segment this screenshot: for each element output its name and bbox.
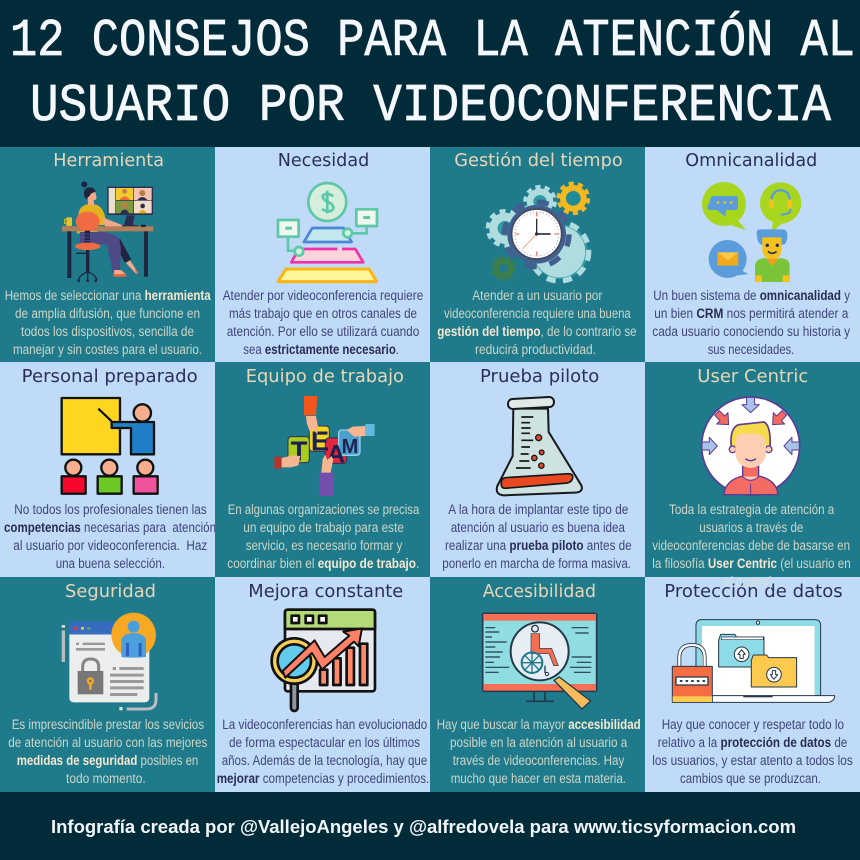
text block: Gestión del tiempo [437, 288, 637, 357]
icon: laboratory flask [497, 397, 582, 495]
panel: Personal preparado [0, 362, 216, 577]
icon: hands building the word TEAM [274, 396, 375, 496]
text block: Prueba piloto: A la hora de implantar este tipo de [448, 502, 628, 517]
text block: Gestión del tiempo: videoconferencia requiere una buena [444, 306, 631, 321]
icon: pyramid with coin [278, 183, 377, 282]
icon: user surrounded by arrows [702, 397, 800, 495]
text block: Seguridad: de atención al usuario con las mejores [8, 735, 208, 750]
heading: Personal preparado: Personal preparado [22, 366, 198, 387]
icon: communication channels and agent [702, 182, 801, 282]
panel: Protección de datos [645, 577, 860, 792]
text block: Equipo de trabajo [227, 502, 420, 571]
heading: Mejora constante: Mejora constante [248, 581, 403, 602]
text block: User Centric: Toda la estrategia de atención a [669, 502, 835, 517]
panel: Gestión del tiempo [430, 147, 645, 362]
text block: Necesidad: Atender por videoconferencia requiere [223, 288, 423, 303]
text block: Personal preparado [4, 502, 216, 571]
text block: Necesidad: más trabajo que en otros canales de [229, 306, 417, 321]
text block: Accesibilidad: través de videoconferencias. Hay [453, 753, 625, 768]
text block: Seguridad: Es imprescindible prestar los sevicios [12, 717, 204, 732]
text block: Seguridad: todo momento. [66, 771, 146, 786]
heading: Prueba piloto: Prueba piloto [480, 366, 599, 387]
text block: Necesidad: sea estrictamente necesario. [243, 342, 399, 357]
panel: Omnicanalidad [645, 147, 860, 362]
text block: User Centric: la filosofía User Centric (el usuario en [652, 556, 851, 571]
heading: User Centric: User Centric [697, 366, 808, 387]
icon: hands building the word TEAM: E [311, 426, 329, 457]
text block: Mejora constante: La videoconferencias han evolucionado [222, 717, 427, 732]
text block: Equipo de trabajo: coordinar bien el equipo de trabajo. [227, 556, 419, 571]
heading: Equipo de trabajo: Equipo de trabajo [246, 366, 404, 387]
heading: Necesidad: Necesidad [278, 150, 369, 171]
text block: Prueba piloto: atención al usuario es buena idea [451, 520, 625, 535]
text block: Prueba piloto [442, 502, 632, 571]
title [10, 10, 855, 136]
text block: Mejora constante: de forma espectacular en los últimos [229, 735, 420, 750]
text block: Omnicanalidad: sus necesidades. [708, 342, 794, 357]
text block: Herramienta: todos los dispositivos, sencilla de [21, 324, 194, 339]
footer credit: Infografía creada por @VallejoAngeles y @alfredovela para www.ticsyformacion.com [51, 816, 796, 837]
heading: Gestión del tiempo: Gestión del tiempo [454, 150, 623, 171]
text block: Accesibilidad [437, 717, 641, 786]
text block: Seguridad [8, 717, 208, 786]
text block: Gestión del tiempo: gestión del tiempo, de lo contrario se [437, 324, 637, 339]
panel: Necesidad [215, 147, 430, 362]
icon: accessible screen with magnifier [483, 613, 597, 709]
text block: Herramienta: de amplia difusión, que funcione en [15, 306, 200, 321]
heading: Herramienta: Herramienta [53, 150, 164, 171]
icon: hands building the word TEAM: A [327, 441, 345, 469]
text block: Omnicanalidad: un bien CRM nos permitirá atender a [654, 306, 849, 321]
icon: hands building the word TEAM: T [291, 436, 308, 467]
text block: User Centric [652, 502, 851, 571]
text block: Necesidad [223, 288, 423, 357]
icon: person at desk in a video call [62, 181, 153, 282]
text block: Mejora constante: años. Además de la tecnología, hay que [222, 753, 427, 768]
text block: Personal preparado: No todos los profesionales tienen las [14, 502, 207, 517]
text block: Personal preparado: al usuario por videoconferencia. Haz [13, 538, 208, 553]
text block: Accesibilidad: posible en la atención al usuario a [450, 735, 628, 750]
text block: Equipo de trabajo: servicio, es necesario formar y [246, 538, 403, 553]
text block: Personal preparado: competencias necesarias para atención [4, 520, 216, 535]
panel: Seguridad [0, 577, 215, 792]
panel: User Centric [645, 362, 860, 577]
text block: Omnicanalidad [652, 288, 850, 357]
text block: Personal preparado: una buena selección. [56, 556, 165, 571]
text block: Protección de datos [652, 717, 853, 786]
text block: Equipo de trabajo: un equipo de trabajo para este [243, 520, 404, 535]
text block: Protección de datos: cambios que se produzcan. [680, 771, 821, 786]
text block: Herramienta: Hemos de seleccionar una herramienta [5, 288, 211, 303]
text block: Mejora constante: mejorar competencias y procedimientos. [217, 771, 429, 786]
text block: Gestión del tiempo: Atender a un usuario por [472, 288, 603, 303]
panel: Equipo de trabajo [215, 362, 430, 577]
icon: hands building the word TEAM: M [342, 436, 358, 458]
icon: secure profile window [62, 613, 156, 710]
text block: Protección de datos: relativo a la protección de datos de [658, 735, 847, 750]
text block: Gestión del tiempo: reducirá productividad. [475, 342, 596, 357]
panel: Mejora constante [215, 577, 430, 792]
icon: analytics chart with magnifier [272, 610, 375, 711]
heading: Seguridad: Seguridad [65, 581, 156, 602]
text block: Prueba piloto: realizar una prueba piloto antes de [445, 538, 632, 553]
panel: Herramienta [0, 147, 215, 362]
text block: Mejora constante [217, 717, 429, 786]
text block: Omnicanalidad: Un buen sistema de omnicanalidad y [653, 288, 850, 303]
heading: Protección de datos: Protección de datos [664, 581, 843, 602]
text block: Accesibilidad: mucho que hacer en esta materia. [451, 771, 626, 786]
text block: Prueba piloto: ponerlo en marcha de forma masiva. [442, 556, 631, 571]
icon: laptop, padlock and folders [672, 620, 835, 702]
text block: Seguridad: medidas de seguridad posibles en [17, 753, 198, 768]
text block: Equipo de trabajo: En algunas organizaciones se precisa [228, 502, 420, 517]
text block: Accesibilidad: Hay que buscar la mayor accesibilidad [437, 717, 641, 732]
text block: Herramienta: manejar y sin costes para el usuario. [13, 342, 202, 357]
text block: User Centric: usuarios a través de [699, 520, 803, 535]
icon: gears and clock [488, 183, 589, 281]
panel: Prueba piloto [430, 362, 645, 577]
heading: Omnicanalidad: Omnicanalidad [685, 150, 817, 171]
overflowing text from User Centric: el centro) [724, 574, 773, 589]
text block: Necesidad: atención. Por ello se utilizará cuando [227, 324, 419, 339]
text block: Herramienta [5, 288, 211, 357]
panel: Accesibilidad [430, 577, 645, 792]
icon: trainer at board with students [62, 398, 158, 494]
heading: Accesibilidad: Accesibilidad [483, 581, 596, 602]
